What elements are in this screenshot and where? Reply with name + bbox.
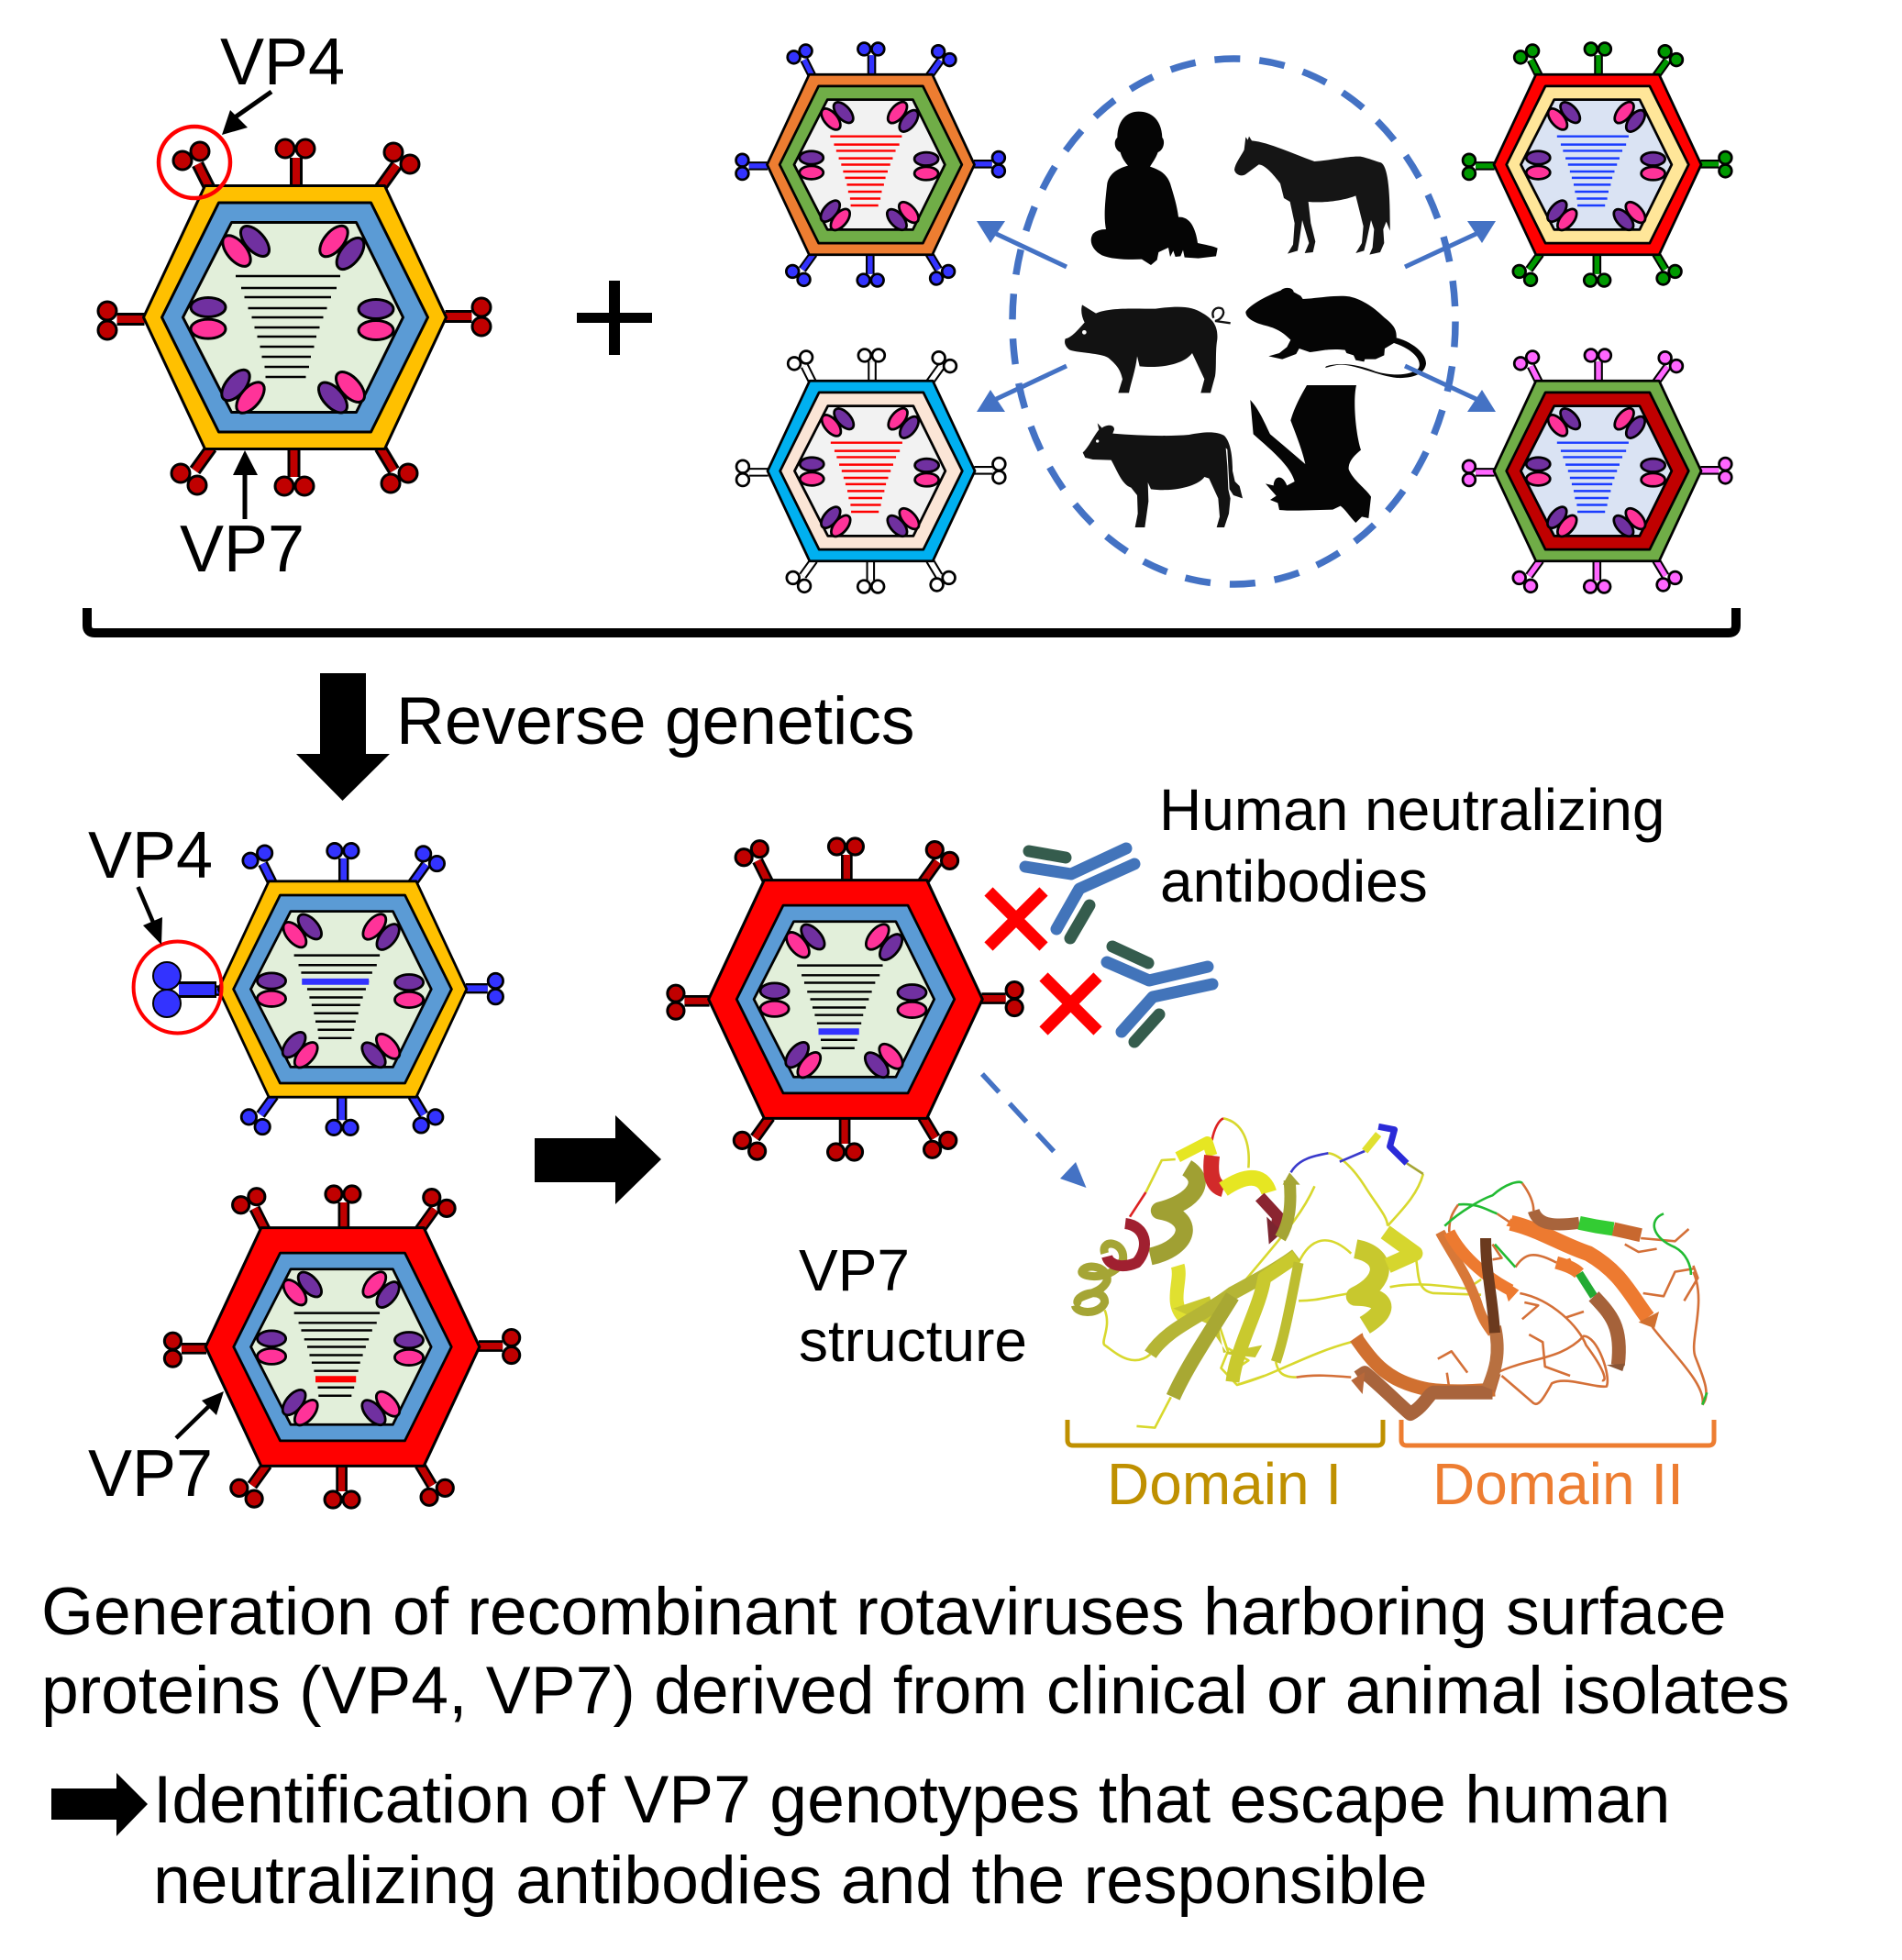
virus: green and dark red <box>1463 349 1731 592</box>
arrow: to cyan virus <box>977 366 1067 412</box>
virus: red coat bottom left <box>164 1186 520 1508</box>
arrow: VP4 lower pointer <box>138 887 162 945</box>
domain I ribbon <box>1075 1118 1481 1428</box>
icon: horse <box>1234 137 1390 255</box>
arrow: VP4 pointer <box>222 92 271 135</box>
summary text: proteins (VP4, VP7) derived from clinical or animal isolates <box>41 1653 1790 1728</box>
dashed ellipse: host species <box>1012 59 1455 584</box>
plus sign <box>577 281 652 355</box>
protein ribbon structure <box>1075 1118 1707 1428</box>
arrow: VP7 lower pointer <box>176 1391 224 1438</box>
arrow: to orange virus <box>977 221 1067 267</box>
summary text: Generation of recombinant rotaviruses harboring surface <box>41 1574 1726 1649</box>
label: VP7 structure: VP7 <box>799 1237 910 1303</box>
label: domain I: Domain I <box>1107 1451 1342 1517</box>
arrow: to red virus <box>1405 221 1496 267</box>
domain II ribbon <box>1297 1182 1707 1414</box>
bracket: domain I <box>1067 1420 1383 1445</box>
red circle highlighting enlarged VP4 <box>134 941 222 1033</box>
arrow: VP7 pointer <box>233 450 258 519</box>
conclusion text: Identification of VP7 genotypes that escape human <box>153 1762 1670 1837</box>
label: VP7 lower: VP7 <box>88 1437 213 1511</box>
arrow: to green virus <box>1405 366 1496 412</box>
label: human neutralizing antibodies: antibodies <box>1160 848 1428 914</box>
label: VP7 structure: structure <box>799 1308 1027 1374</box>
virus: gold with blue VP4 <box>182 843 503 1135</box>
bracket: all viruses <box>87 608 1736 633</box>
icon: pig <box>1065 305 1231 393</box>
antibody 1 <box>1025 848 1134 938</box>
conclusion text: neutralizing antibodies and the responsible <box>153 1843 1428 1918</box>
arrow: down reverse genetics <box>296 673 390 801</box>
animal silhouettes: lower rows <box>1065 288 1426 527</box>
animal silhouettes: top row <box>1091 112 1390 265</box>
icon: baby <box>1091 112 1218 265</box>
white mask over left spike <box>147 963 211 1018</box>
label: reverse genetics: Reverse genetics <box>396 683 914 759</box>
virus: orange and green <box>736 43 1005 286</box>
label: VP4 top: VP4 <box>220 26 345 99</box>
cross mark 1 <box>989 891 1044 947</box>
virus: red and cream <box>1463 43 1731 286</box>
arrows from hosts to viruses <box>977 221 1496 412</box>
enlarged VP4 spike <box>153 962 216 1017</box>
icon: cow <box>1083 423 1243 527</box>
virus: main rotavirus with VP4 and VP7 <box>98 139 491 495</box>
label: human neutralizing antibodies: Human neutralizing <box>1159 777 1664 843</box>
virus: cyan and beige <box>736 349 1005 592</box>
cross mark 2 <box>1044 977 1098 1031</box>
arrow: big right arrow <box>535 1115 661 1204</box>
label: VP4 lower: VP4 <box>88 819 213 892</box>
virus: red coat recombinant <box>668 838 1023 1160</box>
icon: rat <box>1245 288 1426 378</box>
red circle highlighting VP4 spike <box>159 127 230 198</box>
label: VP7 top: VP7 <box>180 513 304 586</box>
arrow: conclusion <box>51 1773 148 1836</box>
bracket: domain II <box>1401 1420 1714 1445</box>
label: domain II: Domain II <box>1432 1451 1684 1517</box>
icon: bat <box>1250 385 1371 523</box>
arrow: dashed to VP7 structure <box>982 1074 1086 1188</box>
antibody 2 <box>1107 947 1212 1042</box>
